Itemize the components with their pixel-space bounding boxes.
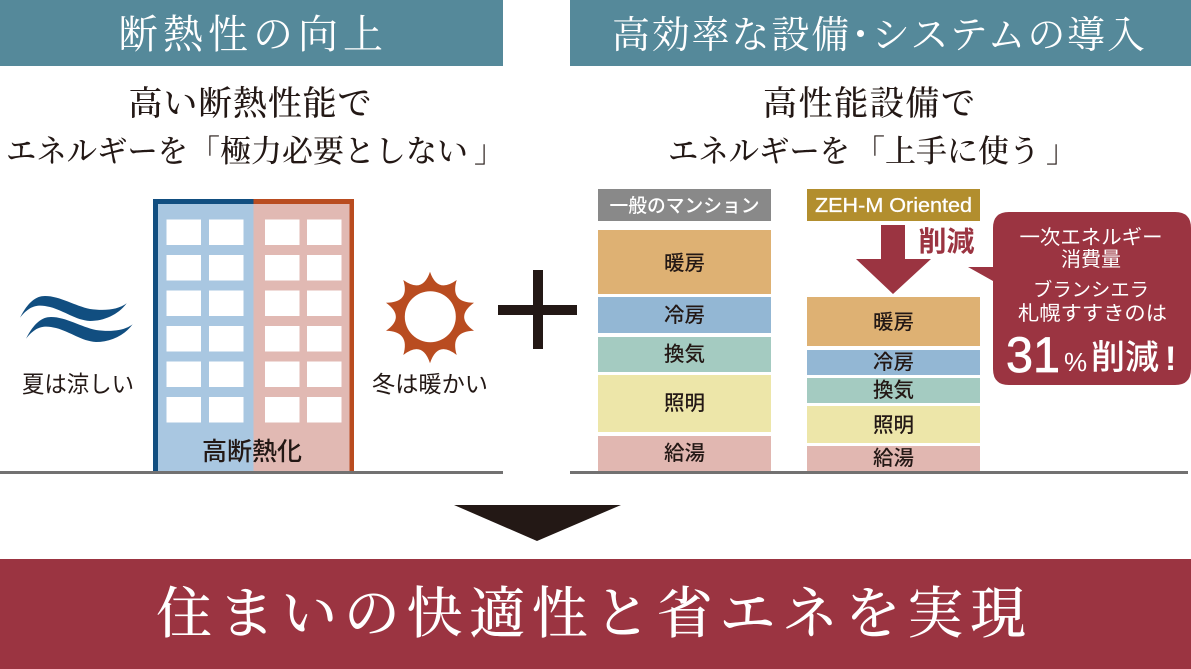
ground line: right [570,471,1188,474]
building [153,199,354,471]
stacked bar: ZEH-M Oriented [807,297,980,471]
icon: cool wind waves [20,296,133,342]
callout: 31% reduction: 札幌すすきのは [1018,302,1167,325]
stacked bar: ZEH-M Oriented: 暖房 [873,311,914,334]
subheading: left [6,85,505,169]
header: right [570,0,1191,66]
callout: 31% reduction: 31 [1006,327,1060,383]
subheading: right: エネルギーを [668,134,850,169]
stacked bar: standard condominium: 給湯 [664,442,705,465]
result banner: 住まいの快適性と省エネを実現 [156,584,1026,646]
label: cool in summer: 夏は涼しい [22,371,134,397]
label: ZEH-M Oriented [807,189,980,221]
label: reduction: 削減 [918,226,975,257]
stacked bar: ZEH-M Oriented: 給湯 [873,447,914,470]
subheading: right: 高性能設備で [763,85,975,123]
callout: 31% reduction: % [1064,347,1087,377]
arrow: down to result [454,505,621,541]
label: standard condominium [598,189,771,221]
ground line: left [0,471,503,474]
stacked bar: ZEH-M Oriented: 照明 [873,414,914,437]
label: standard condominium: 一般のマンション [610,195,760,217]
subheading: left: エネルギーを [6,134,188,169]
header: right: 高効率な設備･システムの導入 [612,15,1145,57]
callout: 31% reduction: 一次エネルギー [1020,226,1162,249]
label: ZEH-M Oriented: ZEH-M Oriented [815,195,972,217]
subheading: right: 「上手に使う [854,134,1040,169]
stacked bar: standard condominium: 冷房 [664,304,705,327]
subheading: right: 」 [1046,134,1077,169]
subheading: left: 高い断熱性能で [128,85,372,123]
icon: plus [498,270,577,349]
arrow: reduction [856,225,931,294]
stacked bar: standard condominium: 換気 [664,343,705,366]
header: left: 断熱性の向上 [118,12,383,57]
subheading: left: 「極力必要としない [189,134,468,169]
subheading: right [668,85,1077,169]
icon: sun [386,272,474,363]
callout: 31% reduction: ブランシエラ [1033,278,1149,301]
label: warm in winter: 冬は暖かい [372,371,488,397]
building: 高断熱化 [202,438,302,466]
result banner [0,559,1191,669]
stacked bar: ZEH-M Oriented: 換気 [873,379,914,402]
callout: 31% reduction: 削減 [1091,339,1159,377]
stacked bar: standard condominium: 暖房 [664,252,705,275]
stacked bar: ZEH-M Oriented: 冷房 [873,351,914,374]
subheading: left: 」 [474,134,505,169]
callout: 31% reduction: ! [1165,340,1176,378]
stacked bar: standard condominium [598,230,771,471]
callout: 31% reduction: 消費量 [1061,248,1121,271]
header: left [0,0,503,66]
callout: 31% reduction [968,212,1191,385]
stacked bar: standard condominium: 照明 [664,392,705,415]
